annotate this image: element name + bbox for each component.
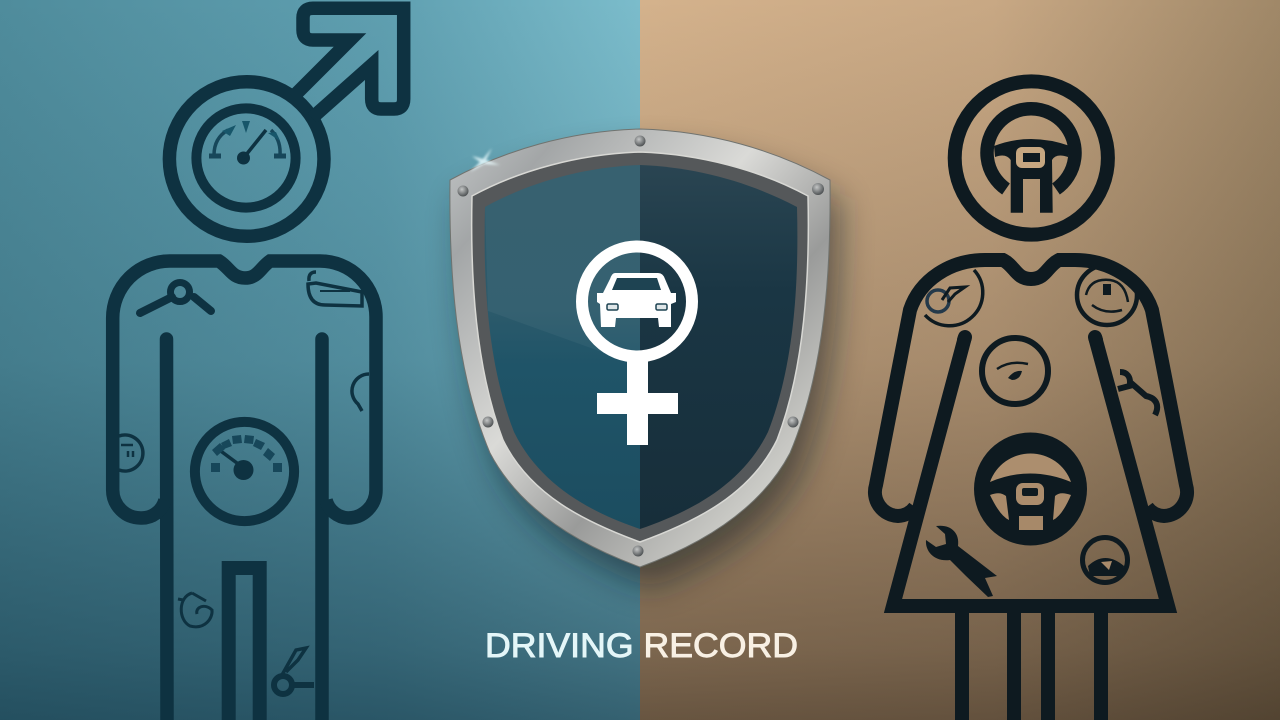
- icon: wrench in skirt: [926, 526, 997, 597]
- shield right panel: [640, 165, 797, 529]
- icon: small dial on left arm: [119, 435, 143, 471]
- icon: belly dial: [982, 338, 1048, 404]
- male symbol head ring: [169, 82, 324, 236]
- legs: [962, 606, 1101, 720]
- sparkle: [470, 148, 500, 172]
- inseam: [229, 568, 260, 720]
- icon: circle with gauge on right shoulder: [1077, 265, 1137, 325]
- shield: [450, 129, 830, 567]
- caption: driving record: DRIVING RECORD: [485, 627, 798, 665]
- dress outline: [893, 337, 1168, 606]
- shield steel rim: [450, 129, 830, 567]
- shoulders and arm loops: [113, 261, 376, 518]
- female shoulders and arms: [875, 260, 1187, 516]
- shield left panel: [485, 165, 640, 529]
- icon: speedometer on belly: [195, 422, 294, 521]
- female head ring: [955, 81, 1108, 235]
- shield glare: [485, 165, 640, 362]
- icon: large steering wheel: [974, 432, 1087, 546]
- icon: small steering wheel in skirt: [1082, 538, 1128, 582]
- dress shoulder caps: [964, 337, 1096, 340]
- icon: car part on shoulder: [308, 272, 362, 306]
- icon: hook on right arm: [352, 374, 369, 411]
- icon: key on leg: [274, 648, 314, 694]
- icon: circle with tool on left shoulder: [925, 270, 983, 326]
- background: right tan panel: [640, 0, 1280, 720]
- shield shadow: [460, 150, 840, 588]
- icon: speedometer in head: [196, 108, 296, 208]
- female symbol: [582, 246, 692, 445]
- icon: car front: [597, 273, 676, 327]
- icon: wrench on right arm: [1118, 372, 1157, 415]
- torso lines: [166, 339, 322, 720]
- male symbol arrow: [293, 8, 404, 118]
- icon: wrench on chest: [140, 282, 211, 313]
- icon: swirl on leg: [178, 593, 212, 627]
- shield inner dark band: [472, 152, 808, 542]
- rivets: [458, 136, 824, 556]
- background: left teal panel: [0, 0, 640, 720]
- male figure: [113, 8, 404, 720]
- female figure: [875, 81, 1187, 720]
- icon: steering wheel in head: [987, 109, 1075, 213]
